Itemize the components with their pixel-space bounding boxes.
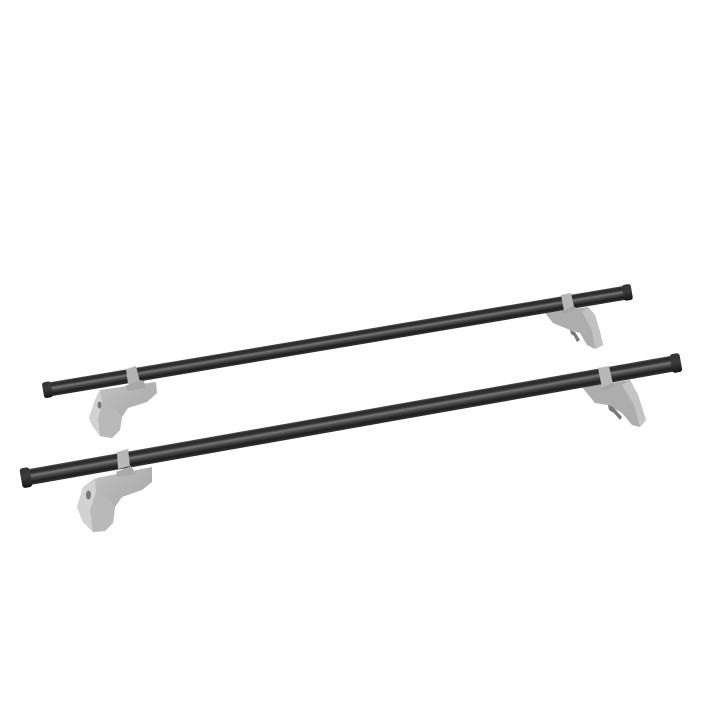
end cap: rear right (622, 284, 633, 301)
end cap: rear left (42, 381, 53, 398)
clip: rear right (560, 293, 578, 314)
end cap: front right (669, 353, 683, 373)
bar: rear (42, 284, 633, 398)
clip: front left (116, 449, 136, 477)
foot: front left (77, 467, 152, 532)
clip: rear left (125, 366, 146, 391)
foot: front right (582, 380, 646, 427)
clip: front right (598, 366, 617, 391)
foot: rear left (89, 382, 157, 438)
foot: rear right (545, 307, 603, 349)
end cap: front left (19, 467, 33, 488)
bar: front (19, 352, 683, 488)
